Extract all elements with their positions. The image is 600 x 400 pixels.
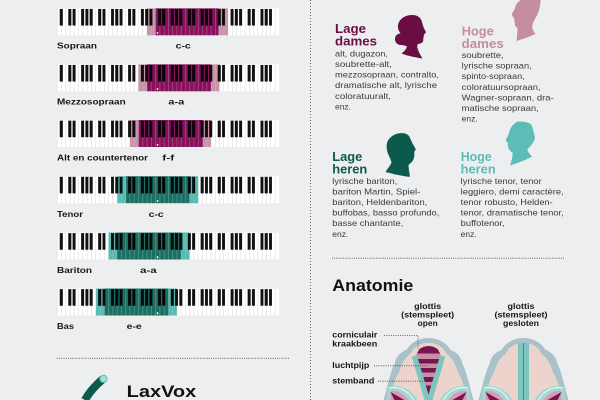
text: lage heren list: enz. (332, 230, 348, 239)
text: lage heren list: basse chantante, (332, 219, 403, 228)
keyboard row: Bas (57, 288, 279, 316)
label: Tenor: c-c (149, 210, 164, 219)
label: glottis open: glottis (414, 302, 442, 311)
heading: Lage dames: dames (335, 34, 377, 49)
heading: Hoge heren: heren (461, 162, 496, 177)
label: corniculair kraakbeen (332, 331, 378, 348)
label: Alt en countertenor: f-f (162, 154, 175, 163)
label: Bariton: a-a (140, 266, 157, 275)
keyboard row: Bariton (57, 232, 279, 260)
text: hoge heren list: leggiero, demi caractère, (461, 188, 564, 196)
label: Bariton: Bariton (57, 266, 92, 275)
label: glottis open (401, 302, 454, 328)
diagram: open glottis (384, 338, 474, 400)
icon: hoge dames silhouette (512, 0, 540, 41)
text: lage heren list: bariton Martin, Spiel- (332, 188, 421, 196)
label: Bas (57, 322, 142, 331)
label: glottis open: open (418, 319, 438, 328)
text: hoge dames list: Wagner-sopraan, dra- (462, 93, 554, 102)
text: hoge heren list (461, 177, 564, 239)
label: Sopraan (57, 42, 191, 51)
text: lage dames list: alt, dugazon, (335, 50, 388, 58)
text: hoge dames list: coloratuursopraan, (462, 83, 541, 92)
text: lage heren list: lyrische bariton, (332, 177, 397, 186)
text: hoge dames list: spinto-sopraan, (462, 72, 525, 81)
heading: Anatomie: Anatomie (332, 277, 413, 295)
label: glottis gesloten: gesloten (503, 319, 539, 328)
text: hoge heren list: lyrische tenor, tenor (461, 177, 542, 186)
keyboard row: Sopraan (57, 8, 279, 35)
diagram: closed glottis (478, 338, 568, 400)
heading: Lage heren: heren (332, 162, 367, 177)
text: hoge heren list: enz. (461, 230, 477, 239)
keyboard row: Tenor (57, 176, 279, 203)
text: lage dames list: soubrette-alt, (335, 60, 392, 69)
label: Sopraan: Sopraan (57, 42, 97, 51)
icon: LaxVox tube (85, 375, 107, 400)
heading: Lage heren (332, 149, 367, 177)
label: Tenor: Tenor (57, 210, 84, 219)
text: lage heren list: bariton, Heldenbariton, (332, 198, 427, 207)
icon: lage heren silhouette (386, 133, 416, 177)
heading: Hoge heren (461, 149, 496, 177)
label: Bas: e-e (127, 322, 142, 331)
heading: Lage dames: Lage (335, 21, 366, 36)
keyboard row: Alt en countertenor (57, 120, 279, 147)
text: lage dames list: dramatische alt, lyrische (335, 81, 438, 90)
label: glottis gesloten: glottis (508, 302, 535, 311)
text: lage dames list: coloratuuralt, (335, 92, 391, 101)
label: Sopraan: c-c (176, 42, 191, 51)
text: hoge heren list: tenor robusto, Helden- (461, 198, 553, 207)
text: hoge dames list: enz. (462, 115, 478, 124)
text: lage heren list (332, 177, 439, 239)
label: Mezzosopraan: Mezzosopraan (57, 97, 126, 106)
label: Alt en countertenor (57, 154, 175, 163)
label: Mezzosopraan (57, 97, 185, 106)
label: glottis gesloten: (stemspleet) (494, 310, 548, 319)
label: glottis gesloten (494, 302, 548, 328)
label: Mezzosopraan: a-a (168, 97, 185, 106)
text: lage heren list: buffobas, basso profundo, (332, 209, 439, 218)
text: hoge dames list: matische sopraan, (462, 104, 539, 113)
heading: Hoge dames (462, 23, 504, 51)
text: lage dames list (335, 50, 439, 111)
text: hoge dames list (462, 51, 554, 124)
text: hoge heren list: tenor, dramatische tenor, (461, 209, 564, 218)
heading: Lage heren: Lage (332, 149, 362, 164)
heading: Hoge dames: dames (462, 36, 504, 51)
label: Tenor (57, 210, 164, 219)
text: hoge dames list: lyrische sopraan, (462, 62, 532, 71)
keyboard row: Mezzosopraan (57, 64, 279, 91)
heading: Hoge heren: Hoge (461, 149, 492, 164)
text: lage dames list: mezzosopraan, contralto, (335, 71, 439, 80)
label: Bariton (57, 266, 157, 275)
icon: hoge heren silhouette (506, 121, 535, 166)
icon: lage dames silhouette (395, 15, 426, 58)
label: Alt en countertenor: Alt en countertenor (57, 154, 149, 163)
label: glottis open: (stemspleet) (401, 310, 454, 319)
label: stemband: stemband (332, 376, 374, 385)
label: luchtpijp: luchtpijp (332, 361, 369, 370)
label: corniculair kraakbeen: corniculair (332, 331, 378, 340)
text: hoge dames list: soubrette, (462, 51, 504, 60)
heading: Hoge dames: Hoge (462, 23, 494, 38)
text: lage dames list: enz. (335, 102, 351, 111)
label: Bas: Bas (57, 322, 74, 331)
text: hoge heren list: buffotenor, (461, 219, 505, 228)
heading: Lage dames (335, 21, 377, 49)
label: corniculair kraakbeen: kraakbeen (332, 339, 377, 348)
